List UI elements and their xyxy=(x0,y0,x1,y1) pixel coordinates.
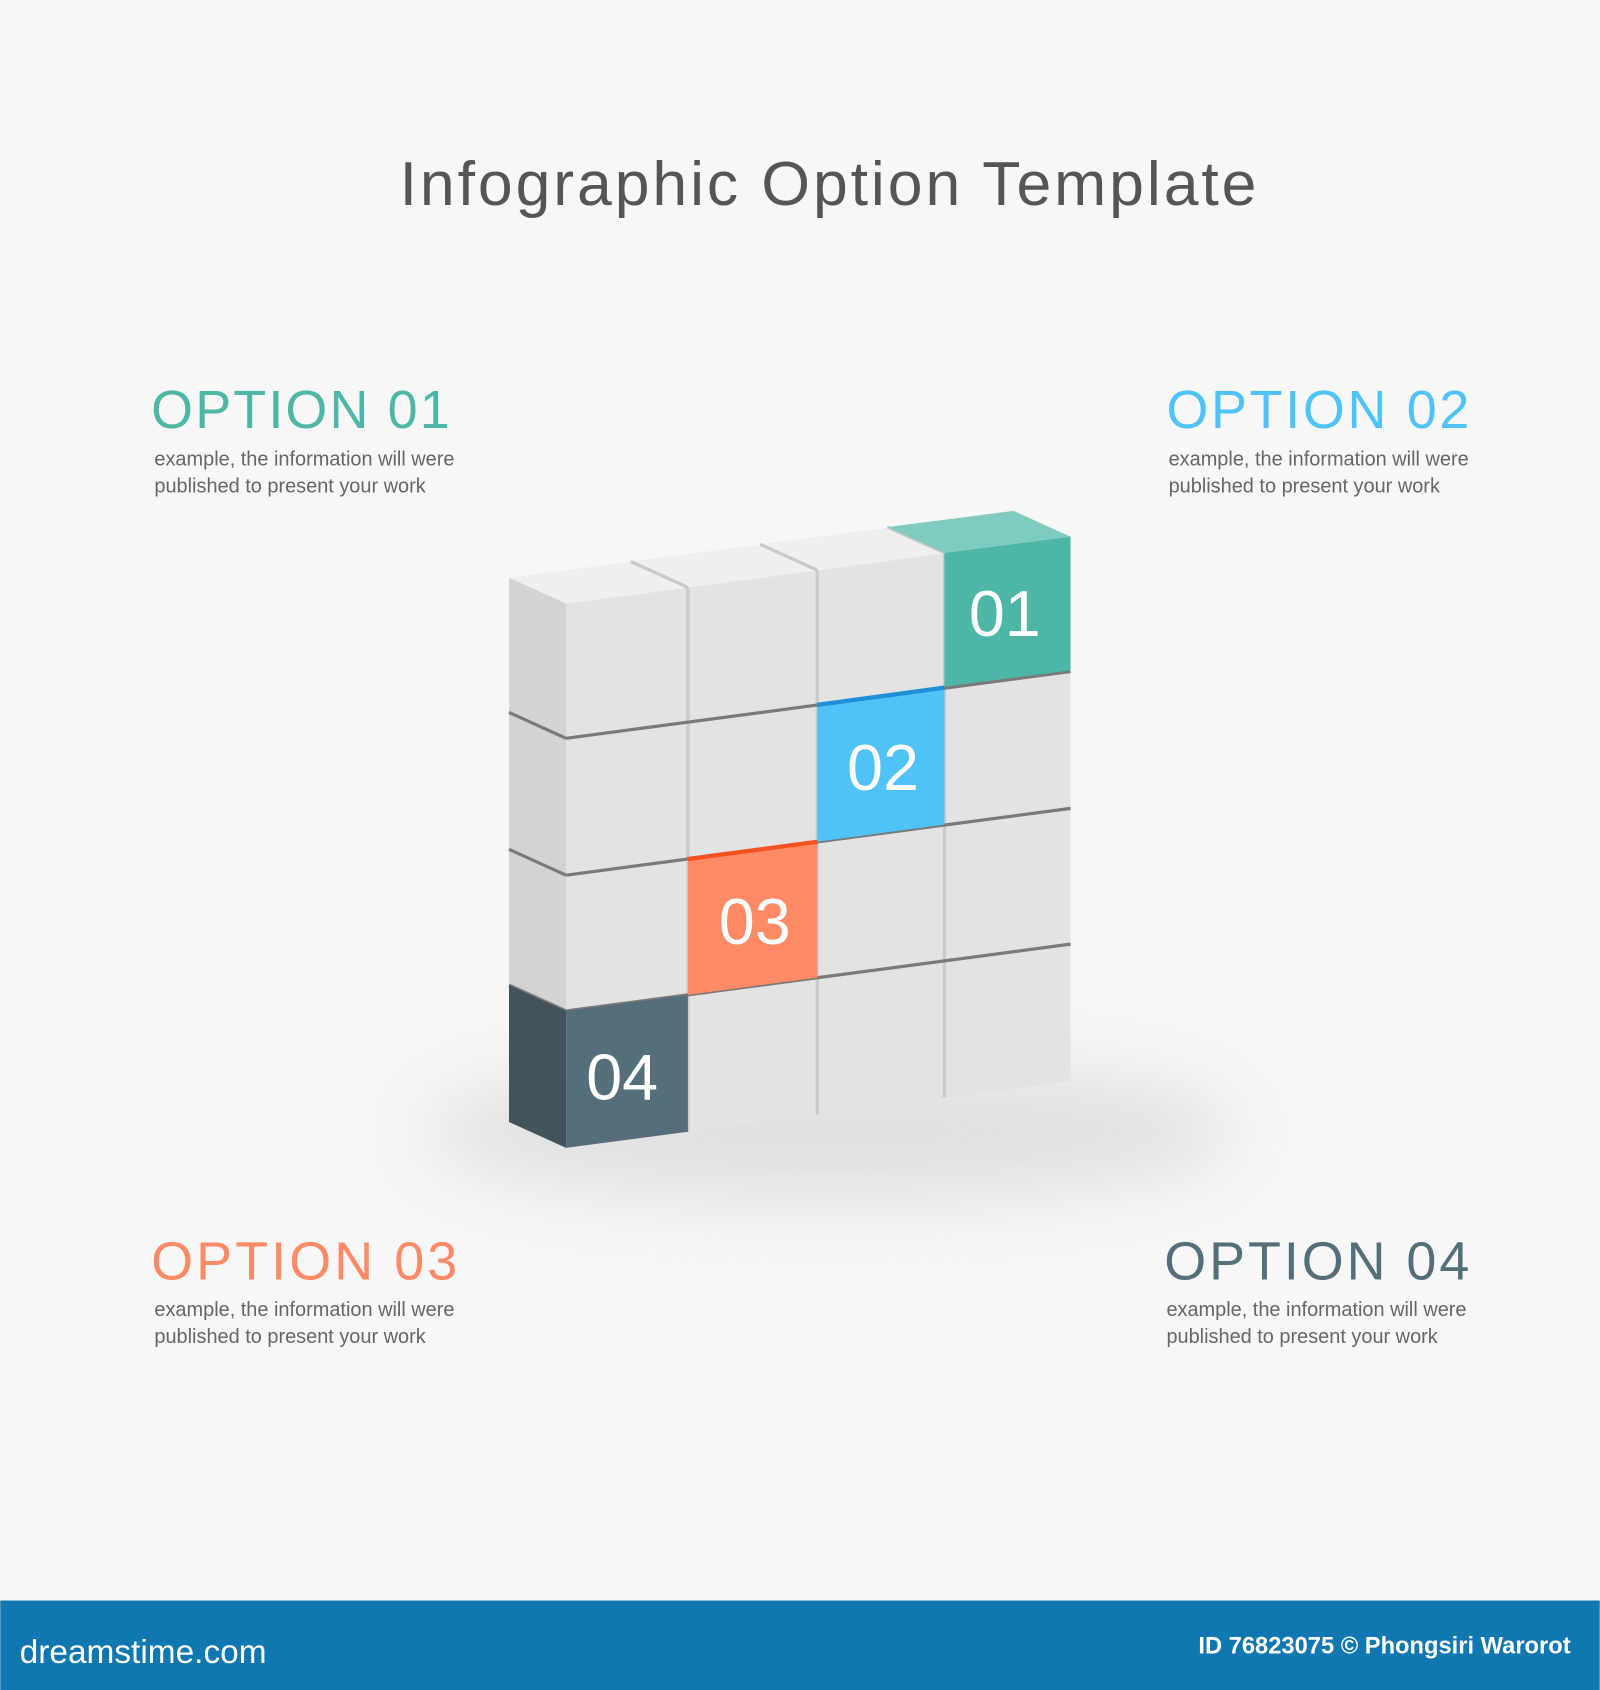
cube 01 xyxy=(887,511,1071,687)
option 02 text block xyxy=(1166,380,1469,498)
option 01 text block xyxy=(151,380,454,498)
cube 02 xyxy=(817,688,944,842)
option 04 text block: OPTION 04 xyxy=(1164,1231,1469,1291)
option 01 text block: published to present your work xyxy=(154,476,426,498)
option 04 text block: published to present your work xyxy=(1166,1326,1438,1348)
cube 04: 04 xyxy=(586,1040,658,1113)
footer bar xyxy=(0,1601,1600,1690)
cube 03: 03 xyxy=(719,885,791,958)
footer bar: ID 76823075 © Phongsiri Warorot xyxy=(1198,1633,1571,1659)
option 03 text block xyxy=(151,1231,457,1348)
cube 02: 02 xyxy=(847,731,919,804)
option 01 text block: OPTION 01 xyxy=(151,380,450,440)
cube 03 xyxy=(688,842,817,995)
option 02 text block: published to present your work xyxy=(1169,476,1440,498)
option 02 text block: example, the information will were xyxy=(1169,449,1469,471)
option 02 text block: OPTION 02 xyxy=(1166,380,1469,440)
title: Infographic Option Template xyxy=(400,149,1256,219)
shadow xyxy=(421,1062,1240,1202)
cube 01: 01 xyxy=(969,577,1041,650)
option 03 text block: published to present your work xyxy=(154,1326,426,1348)
cube 04 xyxy=(509,985,688,1148)
cube grid xyxy=(509,511,1071,1148)
option 04 text block: example, the information will were xyxy=(1166,1299,1467,1321)
footer bar: dreamstime.com xyxy=(20,1634,267,1671)
option 01 text block: example, the information will were xyxy=(154,449,454,471)
option 03 text block: example, the information will were xyxy=(154,1299,454,1321)
option 03 text block: OPTION 03 xyxy=(151,1231,457,1291)
option 04 text block xyxy=(1164,1231,1469,1348)
